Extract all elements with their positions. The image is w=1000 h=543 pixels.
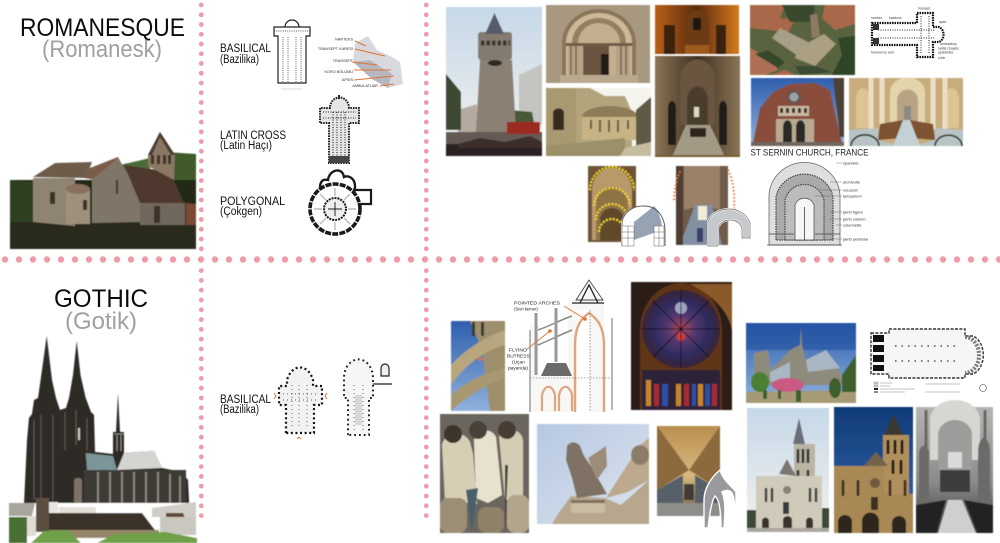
photo: St Sernin aerial view [750,5,855,75]
diagram: Gothic section with labels: (Sivri kemer) [514,306,538,312]
label: latin cross: (Latin Haçı) [220,140,272,152]
plan: St Sernin with labels: transverse arch [871,50,894,54]
diagram: Gothic section with labels: POINTED ARCHES [514,300,560,306]
diagram: church axonometric with labels: TRANSEPT KARESİ [318,46,353,51]
diagram: portal with labels: colonnette [843,222,862,228]
diagram: church axonometric with labels: AMBULATUAR [352,84,378,88]
label: Gothic basilical: (Bazilika) [220,404,259,416]
diagram: church axonometric with labels [318,36,403,88]
label: basilical [220,43,272,66]
photo: barrel-vault arcade [674,166,734,245]
photo: Romanesque nave [655,56,740,157]
title: Gothic [54,285,148,335]
diagram: Gothic section with labels: payanda) [508,366,528,372]
diagram: portal with labels: tympanum [843,194,862,198]
diagram: rib vault [704,470,736,528]
diagram: barrel vault section [621,206,665,246]
diagram: portal with labels: archivolts [843,180,860,184]
diagram: Gothic section with labels: BUTRESS [507,354,530,360]
photo: crypt interior [655,5,739,54]
plan: St Sernin with labels: transept [918,6,930,10]
title: Gothic: (Gotik) [65,308,137,335]
photo: barrel vault with yellow arches [588,166,636,242]
label: Gothic basilical [220,394,272,416]
plan: Notre-Dame [871,329,986,393]
plan: St Sernin with labels: apsidioles [938,50,953,54]
photo: rose window [631,282,732,410]
photo: Notre-Dame [746,323,856,403]
plan: St Sernin with labels: ambulatory [940,42,957,46]
photo: St Sernin facade [751,78,844,146]
diagram: portal with labels: jamb figure [842,210,864,214]
diagram: groin vault [708,209,750,246]
plan: polygonal [310,170,371,234]
plan: Gothic basilical two [344,359,392,435]
photo: Saint-Denis facade [747,408,829,532]
label: polygonal: POLYGONAL [220,196,286,208]
diagram: church axonometric with labels: TRANSEPT [333,59,354,63]
label: basilical: (Bazilika) [220,54,259,66]
diagram: portal with labels: spandrel [843,160,858,166]
label: polygonal [220,196,286,218]
plan: St Sernin with labels: radial chapels [938,46,959,50]
diagram: portal with labels: voussoir [843,188,859,192]
label: latin cross: LATIN CROSS [220,130,286,142]
label: Gothic basilical: BASILICAL [220,394,272,406]
title: Romanesque: (Romanesk) [42,36,162,63]
diagram: church axonometric with labels: APSİS [342,77,353,82]
title: Romanesque [20,14,185,63]
photo: flying buttresses [451,321,505,411]
label: basilical: BASILICAL [220,43,272,55]
title: Romanesque: ROMANESQUE [20,14,185,42]
diagram: Gothic section with labels [507,280,612,412]
photo: Romanesque apse [546,88,651,156]
diagram: portal with labels: jamb pedestal [842,236,868,242]
photo: Romanesque church [10,132,196,249]
diagram: portal with labels: jamb column [842,216,866,222]
photo: jamb statues [440,414,529,533]
plan: latin cross [320,95,359,163]
plan: St Sernin with labels [871,6,959,60]
photo: St Sernin interior [849,78,963,146]
plan: Gothic basilical one [274,367,327,439]
title: Gothic: GOTHIC [54,285,148,313]
diagram: portal with labels [767,160,868,245]
diagram: church axonometric with labels: KORO BÖLÜMÜ [325,70,353,74]
photo: gargoyle [537,424,649,524]
label: polygonal: (Çokgen) [220,206,262,218]
plan: St Sernin with labels: bastions [889,16,902,20]
plan: St Sernin with labels: narthex [871,16,883,20]
photo: Saint-Denis tower [834,407,913,533]
photo: Gothic interior black and white [916,400,993,533]
photo: Cologne cathedral [9,336,197,543]
diagram: Gothic section with labels: FLYING [509,348,527,354]
photo: nave with ribbed vault [657,426,720,516]
caption: St Sernin church: ST SERNIN CHURCH, FRANCE [750,148,868,158]
diagram: Gothic section with labels: (Uçan [512,360,525,366]
plan: St Sernin with labels: apse [939,20,946,24]
photo: Romanesque portal [546,5,650,83]
diagram: church axonometric with labels: NARTEKS [335,38,353,42]
label: latin cross [220,130,286,152]
plan: basilical [274,20,310,89]
photo: Galata tower [446,7,542,156]
plan: St Sernin with labels: choir [938,56,946,60]
